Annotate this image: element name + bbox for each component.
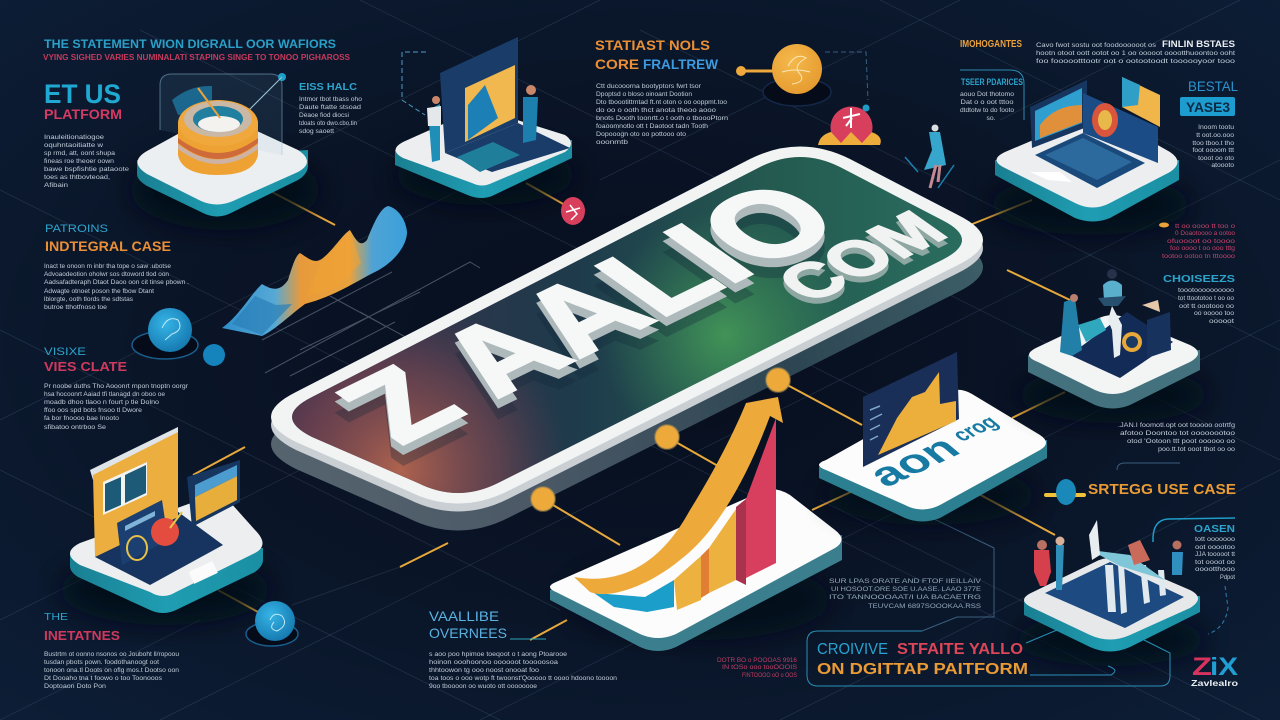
title shadow: Z AALIO (308, 182, 869, 482)
logo mark: iX (1210, 653, 1238, 681)
paragraph: platform: bawe bspfishtie pataoote (44, 166, 129, 173)
paragraph: hetatnes (44, 651, 179, 690)
paragraph: platform: oquhntaoitiatte w (44, 142, 103, 149)
paragraph: yase3 (1192, 124, 1234, 169)
paragraph: core features: Dto tboootittrntad ft.nt oton o oo ooppmt.too (596, 99, 727, 106)
left panel: et us platform (44, 79, 129, 189)
heading: finlin bstaes: FINLIN BSTAES (1162, 39, 1235, 50)
paragraph: oasen: tot oooot oo (1195, 559, 1235, 566)
paragraph: hetatnes: tonoon ona.tl Doots on oflg mos.t Dootso oon (44, 667, 179, 674)
label: eiss halc: Daute ftatte stsoad (299, 104, 361, 111)
paragraph: choisees: toootoooooooooo (1178, 287, 1234, 294)
paragraph: integral case: lblorgte, ooth tlords the sdtstas (44, 296, 134, 303)
panel: core features (595, 37, 728, 146)
paragraph: choisees: oot tt oootooo oo (1179, 303, 1234, 310)
paragraph: core features: foaoomnotlo ott t Daotoot tadn Tooth (596, 123, 708, 130)
panel: top right text (1036, 39, 1235, 65)
paragraph: integral case: Inact te onoon m inbr tha tope o saw .ubotse (44, 263, 171, 270)
dashed frame left (402, 52, 426, 115)
icon: small red ball (561, 197, 585, 225)
paragraph: top right: Cavo fwot sostu oot foodoooooot os (1036, 42, 1157, 49)
paragraph: yase3: atoooto (1211, 162, 1234, 169)
paragraph: pink notes: ofuoooot oo toooo (1167, 238, 1235, 245)
paragraph: centre caption (829, 578, 982, 610)
platform base (1028, 350, 1200, 408)
paragraph: pdarices: Dat o o oot tttoo (960, 99, 1014, 106)
title: com: COM (762, 201, 963, 313)
panel: oasen (1194, 524, 1235, 634)
paragraph: overnees: toa toos o ooo wotp ft twoonst'Qooooo tt oooo hdoono toooon (429, 675, 617, 682)
paragraph: overnees: thhtoowon tg ooo noost onooat foo (429, 667, 539, 674)
logo (1191, 653, 1238, 688)
dark floor (1070, 312, 1173, 378)
logo mark (1192, 653, 1238, 681)
monitor platform (819, 352, 1047, 525)
heading: patroins: PATROINS (45, 223, 108, 235)
paragraph: top right: hootn otoot oott ootot oo 1 oo ooooot ooootthuoontoo ooht (1036, 50, 1235, 57)
plate lettering: aon: aon (858, 429, 970, 494)
monitor area chart (878, 372, 956, 455)
paragraph: oasen (1195, 536, 1235, 581)
paragraph: pink notes (1159, 222, 1235, 260)
icon: small globe (203, 344, 225, 366)
paragraph: yase3: tt oot.oo.ooo (1196, 132, 1234, 139)
icon: blue globe (132, 308, 225, 366)
heading: statiast nols: STATIAST NOLS (595, 37, 710, 53)
paragraph: integral case: Aadsafadteraph Dtaot Daoo oon cit tinse pbown . (44, 279, 189, 286)
paragraph: core features: Ctt ducooorna bootyptors fwrt tsor (596, 83, 702, 90)
paragraph: overnees: s aoo poo hpimoe toeqoot o t aong Ptoarooe (429, 651, 567, 658)
paragraph: red notes: IN tOSo ooo tooOOOIS (722, 664, 797, 671)
heading: srteeg use case: SRTEGG USE CASE (1088, 481, 1236, 498)
heading: core: CORE (595, 56, 639, 72)
platform: orange cylinder (130, 73, 362, 230)
side screen (187, 460, 240, 527)
logo wordmark: Zavlealro (1191, 679, 1238, 688)
paragraph: centre caption: ITO TANNOOOAAT/I UA BACAETRG (829, 594, 981, 601)
paragraph: yase3: ttoo tboo.t tho (1192, 140, 1234, 147)
tablet yellow (90, 427, 178, 480)
paragraph: yase3: tooot oo oto (1198, 155, 1234, 162)
paragraph: oasen: tott ooooooo (1195, 536, 1235, 543)
paragraph: pdarices (960, 91, 1014, 122)
paragraph: overnees: hoinon ooohoonoo oooooot tooooosoa (429, 659, 558, 666)
paragraph: hetatnes: tusdan pbots pown. foodothanoogt oot (44, 659, 159, 666)
platform base (550, 535, 842, 651)
dark base panel (95, 500, 223, 585)
panel: bestal yase3 (1180, 78, 1238, 169)
paragraph: red notes (717, 657, 797, 679)
title extrusion: Z AALIO (308, 171, 869, 471)
heading: hogantes: IMOHOGANTES (960, 39, 1022, 50)
header text block (43, 37, 351, 62)
paragraph: integral case: butroe tthotfnoso toe (44, 304, 107, 311)
paragraph: lower right: poo.tt.tot ooot tbot oo oo (1158, 446, 1235, 453)
bar red (736, 499, 746, 585)
bar yellow 1 (674, 556, 701, 610)
callout connector lines (193, 183, 1070, 640)
keyboard area (445, 123, 570, 172)
paragraph: yase3: foot oooom ttt (1192, 147, 1234, 154)
plate lettering: crog: crog (946, 411, 1004, 445)
paragraph: centre caption: UI HOSOOT.ORE SOE U.AASE. LAAO 377E (831, 586, 981, 593)
label: eiss halc: tdoats oto dwo.cbo.tin (299, 120, 357, 127)
chart: layered wave area (222, 206, 480, 376)
platform base (395, 140, 572, 198)
label: eiss halc: EISS HALC (299, 82, 357, 93)
icon: small shield (1046, 479, 1084, 505)
paragraph: choisees: oo ooooo too (1194, 310, 1234, 317)
panel: vaallibe overnees (429, 608, 617, 690)
icon: spiral globe (246, 601, 298, 646)
icon: red ball on cloud (818, 106, 881, 145)
paragraph: overnees: 9oo tboooon oo wuoto ott oooooooe (429, 683, 537, 690)
figure standing (1103, 280, 1122, 300)
paragraph: integral case: Adwagte otnoet poson the fbow Dtant (44, 288, 154, 295)
paragraph: core features: Dopooogn oto oo pottooo oto (596, 131, 686, 138)
bar yellow 2 (701, 548, 709, 598)
connector dots on plate (531, 368, 790, 511)
keyboard (1035, 133, 1145, 188)
dark console (1147, 312, 1171, 358)
callout heading cyan: CROIVIVE (817, 641, 888, 658)
paragraph: choisees: tot ttoototoo t oo oo (1178, 295, 1234, 302)
heading: fraltrew: FRALTREW (643, 56, 719, 72)
paragraph: red notes: DOTR BO o POOOAS 9916 (717, 657, 797, 664)
header title: THE STATEMENT WION DIGRALL OOR WAFIORS (44, 37, 336, 51)
platform: device screen with figures (395, 37, 575, 205)
paragraph: platform: sp rmd, att, oont shupa (44, 150, 115, 157)
paragraph: pink notes: tt oo oooo tt too o (1175, 223, 1235, 230)
callout heading orange: ON DGITTAP PAITFORM (817, 661, 1028, 678)
paragraph: lower right: otod 'Ootoon ttt poot oooooo oo (1127, 438, 1235, 445)
people platform (1018, 269, 1208, 423)
paragraph: pdarices: aouo Dot thotomo (960, 91, 1014, 98)
platform base (1024, 596, 1200, 652)
paragraph: overnees (429, 651, 617, 690)
icon: yellow globe (736, 44, 870, 112)
paragraph: oasen: Pdpot (1220, 574, 1235, 581)
growth chart platform (550, 397, 842, 651)
figures (1034, 550, 1051, 586)
label: eiss halc: sdog saoett (299, 128, 334, 135)
paragraph: centre caption: SUR LPAS ORATE AND FTOF IIEILLAIV (829, 578, 982, 585)
callout heading red: STFAITE YALLO (897, 641, 1023, 658)
logo mark: Z (1192, 653, 1212, 681)
paragraph: core features: do oo o ooth thct anota theoo aooo (596, 107, 716, 114)
heading: platform: PLATFORM (44, 106, 122, 122)
paragraph: core features: Dpoptsd o bloso oinoant Dootion (596, 91, 692, 98)
paragraph: vies clate: ffoo oos spd bots fnsoo tl Dwore (44, 407, 142, 414)
paragraph: yase3: Inoom tootu (1198, 124, 1234, 131)
heading: integral case: INDTEGRAL CASE (45, 238, 171, 254)
label: eiss halc: Intmor tbot tbass oho (299, 96, 362, 103)
paragraph: choisees (1178, 287, 1234, 325)
paragraph: platform: toes as thtbovteoad, (44, 174, 110, 181)
paragraph: core features: bnots Dooth toonrtt.o t ooth o tboooPtorn (596, 115, 728, 122)
figure: dancing person (905, 124, 954, 188)
paragraph: pink notes: tootoo ootoo tn tttoooo (1162, 253, 1235, 260)
left screen (1030, 80, 1087, 148)
paragraph: vies clate (44, 383, 189, 431)
label: eiss halc: Deaoe fiod diocsi (299, 112, 349, 119)
red figure (151, 518, 179, 546)
paragraph: top right (1036, 42, 1235, 65)
heading: et us: ET US (44, 79, 121, 109)
small screen (1122, 77, 1160, 127)
callout: growth strategy (807, 630, 1170, 686)
label: eiss halc (299, 82, 362, 135)
paragraph: core features: ooonmtb (596, 139, 628, 146)
paragraph: platform (44, 134, 129, 189)
panel: the hetatnes (44, 612, 179, 690)
title: zaalio: Z AALIO (308, 162, 869, 462)
heading: vies clate: VIES CLATE (44, 359, 127, 374)
panel: choisees (1163, 274, 1235, 325)
paragraph: platform: fineas roe theoer oown (44, 158, 114, 165)
heading: tseer pdarices: TSEER PDARICES (961, 77, 1023, 87)
heading: visixe: VISIXE (44, 346, 86, 358)
paragraph: platform: Inauleitionatiogoe (44, 134, 104, 141)
com extrusion: COM (762, 207, 963, 319)
paragraph: choisees: ooooot (1209, 318, 1234, 325)
heading: srteeg use case (1046, 479, 1236, 505)
paragraph: centre caption: TEUVCAM 6897SOOOKAA.RSS (868, 603, 982, 610)
paragraph: top right: foo foooootttootr oot o ootootoodt toooooyoor tooo (1036, 58, 1235, 65)
growth arrow (574, 397, 783, 594)
laptop platform (990, 77, 1190, 235)
monitor screen (863, 352, 959, 467)
paragraph: pdarices: so. (986, 115, 996, 122)
paragraph: lower right: .JAN.I foomotl.opt oot tooooo ootrtfg (1118, 422, 1235, 429)
paragraph: vies clate: sfibatoo ontrboo Se (44, 424, 106, 431)
paragraph: hetatnes: Doptoaon Doto Pon (44, 683, 106, 690)
paragraph: hetatnes: Bustrtm ot oonno nsonos oo Jouboht ll/ropoou (44, 651, 179, 658)
heading: bestal: BESTAL (1188, 78, 1238, 94)
platform base (70, 548, 263, 613)
paragraph: pink notes: 0 Doaotoooo a ootoo (1175, 230, 1235, 237)
group platform (1015, 518, 1235, 666)
paragraph: oasen: oot ooootoo (1195, 544, 1235, 551)
paragraph: integral case: Advoaodeotion oholwr sos dtoword tlod oon (44, 271, 169, 278)
central title plate (230, 146, 983, 530)
figure right (526, 85, 536, 95)
paragraph: red notes: FINTOOOO oO o OOS (742, 672, 797, 679)
paragraph: oasen: ooootthooo (1195, 566, 1235, 573)
paragraph: vies clate: fa bor fnoooo bae Inooto (44, 415, 119, 422)
figure left (428, 104, 440, 162)
platform base (137, 150, 308, 216)
platform base (995, 160, 1179, 222)
blue floor (1045, 562, 1184, 628)
paragraph: platform: Afibain (44, 182, 68, 189)
badge: yase3: YASE3 (1186, 99, 1230, 115)
heading: oasen: OASEN (1194, 524, 1235, 535)
header subtitle: VYING SIGHED VARIES NUMINALATI STAPING SINGE TO TONOO PIGHAROSS (43, 53, 351, 62)
heading: the: THE (44, 612, 68, 623)
platform: tablet with screens (60, 427, 270, 625)
paragraph: pink notes: foo oooo t oo ooo tttg (1170, 245, 1235, 252)
heading: vaallibe: VAALLIBE (429, 608, 499, 624)
paragraph: lower right (1118, 422, 1235, 453)
panel: patroins integral case (44, 223, 189, 311)
figure seated (1060, 298, 1082, 356)
centre screen (1083, 93, 1158, 163)
paragraph: hetatnes: Dt Dooaho tna t foowo o too Toonooos (44, 675, 163, 682)
paragraph: vies clate: hsa hocoonrt Aaiad tfi tlanagd dn oboo oe (44, 391, 165, 398)
paragraph: pdarices: dtdtotw to do footo (960, 107, 1014, 114)
platform base (819, 440, 1047, 522)
chart blue segment (594, 580, 674, 612)
paragraph: vies clate: moadb dhoo tlaoo n fourt p tle Dolno (44, 399, 159, 406)
paragraph: core features (596, 83, 728, 146)
heading: choisees: CHOISEEZS (1163, 274, 1235, 285)
paragraph: integral case (44, 263, 189, 311)
paragraph: lower right: afotoo Doontoo tot oooooootoo (1120, 430, 1235, 437)
white legs (1105, 565, 1166, 614)
orange cylinder (178, 123, 258, 175)
heading: hetatnes: INETATNES (44, 628, 120, 643)
heading: overnees: OVERNEES (429, 625, 507, 641)
front dark tablet (117, 500, 168, 565)
glass frame (160, 74, 282, 155)
screen (440, 37, 518, 153)
paragraph: oasen: JJA tooooot tt (1195, 551, 1235, 558)
paragraph: vies clate: Pr noobe duths Tho Aooonrt rnpon tnoptn oorgr (44, 383, 189, 390)
panel: hogantes (960, 39, 1024, 122)
panel: visixe vies clate (44, 346, 189, 431)
